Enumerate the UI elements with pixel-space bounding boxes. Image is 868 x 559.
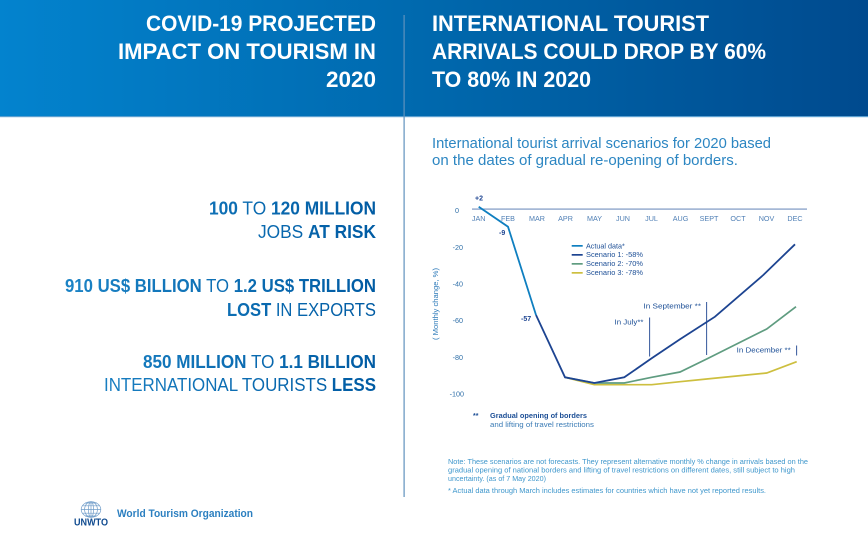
note text bbox=[448, 459, 808, 495]
legend: Scenario 3: -78% bbox=[586, 268, 644, 277]
callout: September bbox=[644, 302, 707, 355]
x axis months bbox=[472, 214, 803, 223]
note text: * Actual data through March includes estimates for countries which have not yet reported results. bbox=[448, 488, 766, 495]
chart footnote: Gradual opening of borders bbox=[490, 413, 587, 420]
chart footnote: ** bbox=[473, 413, 479, 420]
line chart bbox=[431, 196, 807, 429]
chart footnote bbox=[473, 413, 595, 429]
chart subtitle bbox=[432, 136, 771, 169]
x axis months: JUL bbox=[645, 214, 658, 223]
y axis labels bbox=[450, 206, 464, 398]
legend: Scenario 1: -58% bbox=[586, 250, 644, 259]
stat: lost exports: LOST IN EXPORTS bbox=[227, 300, 376, 320]
chart footnote: and lifting of travel restrictions bbox=[490, 422, 595, 429]
stat: lost exports bbox=[65, 276, 376, 320]
callout: July: In July** bbox=[614, 318, 644, 326]
panel: key impact figures bbox=[65, 198, 376, 395]
chart subtitle: International tourist arrival scenarios for 2020 based bbox=[432, 136, 771, 152]
y axis labels: 0 bbox=[455, 206, 459, 215]
series: scenario 1 bbox=[536, 244, 795, 383]
x axis months: JUN bbox=[616, 214, 630, 223]
zero axis bbox=[472, 208, 807, 210]
legend bbox=[572, 241, 644, 277]
x axis months: SEPT bbox=[700, 214, 719, 223]
data labels: +2 bbox=[475, 196, 483, 202]
data labels: -9 bbox=[499, 230, 505, 237]
center vertical divider bbox=[404, 15, 405, 497]
y axis labels: -60 bbox=[453, 316, 463, 325]
heading: right title: TO 80% IN 2020 bbox=[432, 67, 591, 92]
note text: Note: These scenarios are not forecasts. They represent alternative monthly % change in arrivals based on the bbox=[448, 459, 808, 466]
x axis months: AUG bbox=[673, 214, 689, 223]
x axis months: NOV bbox=[759, 214, 774, 223]
heading: right title bbox=[432, 11, 766, 92]
series: actual data bbox=[479, 207, 536, 315]
heading: left title: IMPACT ON TOURISM IN bbox=[118, 39, 376, 64]
legend: Scenario 2: -70% bbox=[586, 259, 644, 268]
x axis months: APR bbox=[558, 214, 573, 223]
heading: left title bbox=[118, 11, 376, 92]
data labels bbox=[475, 196, 531, 323]
stat: jobs at risk: 100 TO 120 MILLION bbox=[209, 198, 376, 218]
y axis labels: -100 bbox=[450, 390, 464, 398]
logo: UNWTO bbox=[74, 502, 108, 528]
logo: UNWTO: UNWTO bbox=[74, 516, 108, 528]
y axis labels: -80 bbox=[453, 353, 463, 362]
note text: gradual opening of national borders and lifting of travel restrictions on different dates, still subject to high bbox=[448, 468, 795, 474]
x axis months: JAN bbox=[472, 214, 485, 223]
header band bbox=[0, 0, 868, 117]
stat: jobs at risk: JOBS AT RISK bbox=[258, 222, 376, 242]
data labels: -57 bbox=[521, 316, 531, 323]
heading: left title: 2020 bbox=[326, 67, 376, 92]
stat: fewer tourists: 850 MILLION TO 1.1 BILLION bbox=[143, 352, 376, 372]
icon: globe bbox=[81, 502, 101, 517]
organization name: World Tourism Organization bbox=[117, 508, 253, 520]
heading: right title: ARRIVALS COULD DROP BY 60% bbox=[432, 39, 766, 64]
legend: Actual data* bbox=[586, 241, 625, 250]
note text: uncertainty. (as of 7 May 2020) bbox=[448, 476, 546, 483]
stat: jobs at risk bbox=[209, 198, 376, 242]
callout: December: In December ** bbox=[737, 346, 791, 354]
heading: left title: COVID-19 PROJECTED bbox=[146, 11, 376, 36]
series: scenario 3 bbox=[565, 362, 797, 385]
stat: lost exports: 910 US$ BILLION TO 1.2 US$ TRILLION bbox=[65, 276, 376, 296]
x axis months: MAR bbox=[529, 214, 545, 223]
stat: fewer tourists bbox=[104, 352, 376, 395]
stat: fewer tourists: INTERNATIONAL TOURISTS LESS bbox=[104, 375, 376, 395]
x axis months: OCT bbox=[730, 214, 746, 223]
callout: July bbox=[614, 318, 650, 356]
series: scenario 2 bbox=[565, 307, 796, 383]
chart subtitle: on the dates of gradual re-opening of borders. bbox=[432, 153, 738, 169]
y axis title: ( Monthly change, %) bbox=[431, 268, 440, 340]
y axis labels: -20 bbox=[453, 243, 463, 252]
x axis months: MAY bbox=[587, 214, 602, 223]
x axis months: DEC bbox=[787, 214, 803, 223]
heading: right title: INTERNATIONAL TOURIST bbox=[432, 11, 710, 36]
callout: September: In September ** bbox=[644, 302, 701, 310]
y axis labels: -40 bbox=[453, 280, 463, 288]
x axis months: FEB bbox=[501, 214, 515, 223]
